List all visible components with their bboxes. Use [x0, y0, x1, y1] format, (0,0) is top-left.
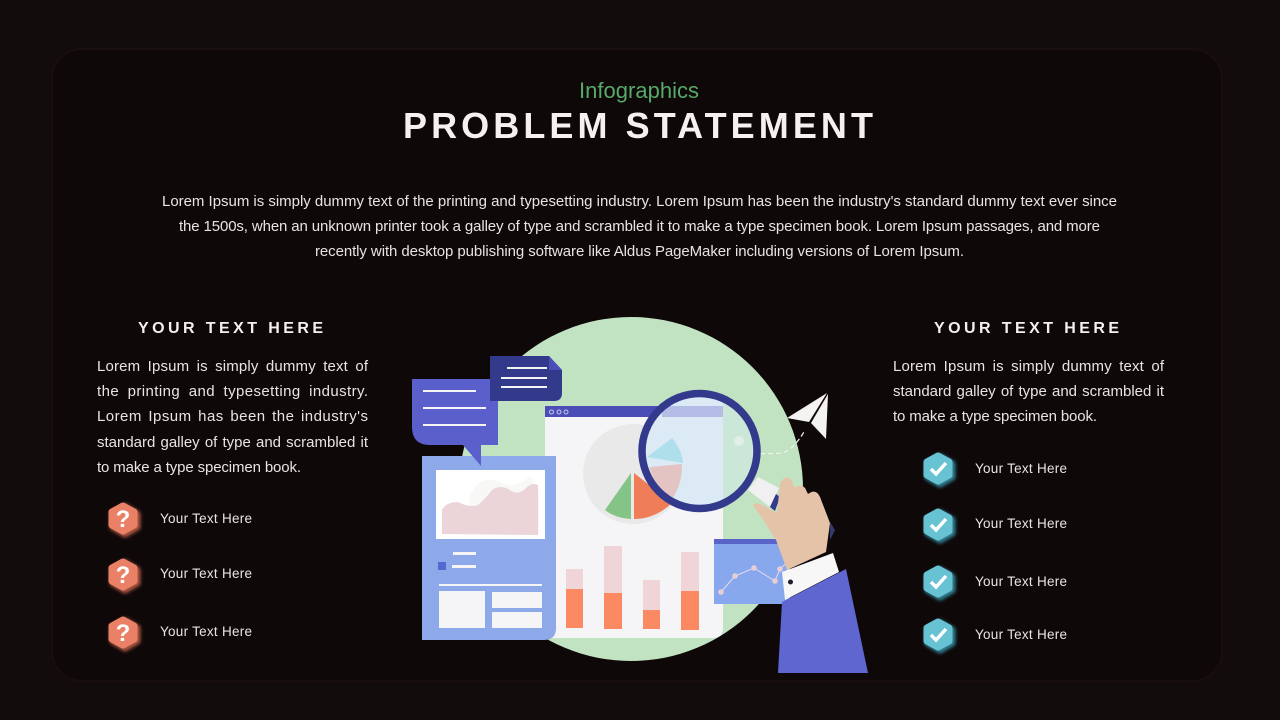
check item 2: Your Text Here: [975, 516, 1067, 531]
check item 1: Your Text Here: [975, 461, 1067, 476]
infographic slide: [97, 82, 1164, 673]
right heading: YOUR TEXT HERE: [934, 320, 1119, 337]
shirt cuff: [782, 553, 839, 600]
speech bubble: [412, 379, 498, 466]
folded note: [490, 356, 562, 401]
check item 3: Your Text Here: [975, 574, 1067, 589]
left body text: the printing and typesetting industry.: [97, 383, 368, 400]
question item 1: [112, 506, 252, 534]
handle: [748, 477, 779, 507]
question item 2: ?: [116, 562, 130, 589]
question item 1: ?: [116, 506, 130, 533]
question item 2: [112, 562, 252, 590]
left body text: [97, 358, 369, 476]
left body text: to make a type specimen book.: [97, 459, 301, 476]
question item 3: [112, 620, 252, 648]
check item 1: [927, 456, 1067, 484]
paper plane: [728, 393, 828, 454]
question item 3: ?: [116, 620, 130, 647]
left heading: YOUR TEXT HERE: [138, 320, 323, 337]
right body text: standard galley of type and scrambled it: [893, 383, 1165, 400]
eyebrow: Infographics: Infographics: [579, 78, 699, 103]
browser window: [545, 406, 723, 638]
panel: right column: [893, 320, 1165, 650]
left body text: standard galley of type and scrambled it: [97, 434, 369, 451]
report card: [422, 456, 556, 640]
hand: [753, 478, 835, 570]
right body text: to make a type specimen book.: [893, 408, 1097, 425]
sleeve: [778, 569, 868, 673]
left body text: Lorem Ipsum is simply dummy text of: [97, 358, 369, 375]
check item 4: Your Text Here: [975, 627, 1067, 642]
check item 3: [927, 569, 1067, 597]
right body text: [893, 358, 1165, 425]
central illustration: [412, 317, 868, 673]
check item 4: [927, 622, 1067, 650]
question item 3: Your Text Here: [160, 624, 252, 639]
intro paragraph: Lorem Ipsum is simply dummy text of the printing and typesetting industry. Lorem Ipsum has been the industry's standard dummy text ever since: [162, 193, 1117, 210]
panel: left column: [97, 320, 369, 648]
check item 2: [927, 512, 1067, 540]
intro paragraph: recently with desktop publishing software like Aldus PageMaker including versions of Lorem Ipsum.: [315, 243, 964, 260]
right body text: Lorem Ipsum is simply dummy text of: [893, 358, 1165, 375]
question item 1: Your Text Here: [160, 511, 252, 526]
magnifying glass: [640, 392, 780, 512]
left body text: Lorem Ipsum has been the industry's: [97, 408, 368, 425]
line chart card: [714, 539, 790, 604]
intro paragraph: the 1500s, when an unknown printer took a galley of type and scrambled it to make a type specimen book. Lorem Ipsum passages, and more: [179, 218, 1100, 235]
pie chart: [583, 424, 683, 524]
lens: [646, 397, 754, 505]
title: PROBLEM STATEMENT: [403, 105, 873, 146]
intro paragraph: [162, 193, 1117, 260]
bar chart: [566, 546, 699, 630]
question item 2: Your Text Here: [160, 566, 252, 581]
green circle: [459, 317, 803, 661]
